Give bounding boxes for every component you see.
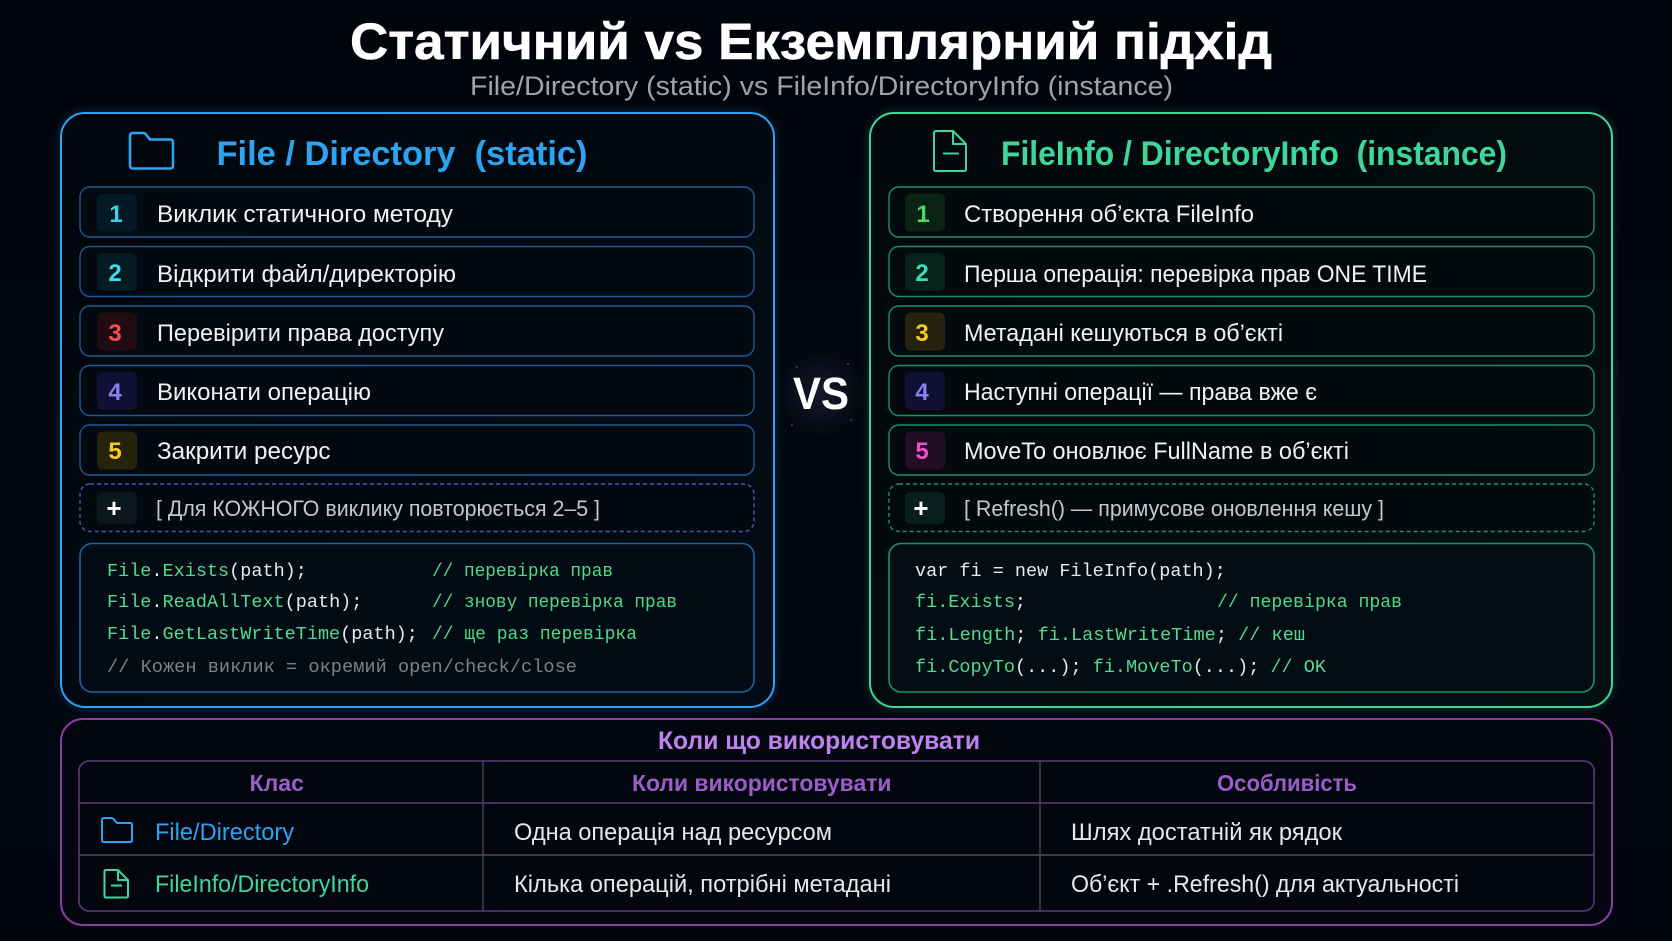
- code block: // перевірка прав: [1217, 592, 1402, 613]
- step 5: 5: [915, 438, 929, 465]
- row: FileInfo/DirectoryInfo: [104, 870, 1459, 898]
- table header: [250, 770, 1357, 796]
- code block: [889, 544, 1594, 692]
- step 1: [889, 187, 1594, 237]
- row: FileInfo/DirectoryInfo: Кілька операцій, потрібні метадані: [514, 871, 891, 898]
- step 3: 3: [915, 320, 929, 347]
- row: File/Directory: File/Directory: [155, 819, 294, 846]
- step 2: Перша операція: перевірка прав ONE TIME: [964, 261, 1427, 288]
- code block: // знову перевірка прав: [432, 592, 677, 613]
- step 3: Метадані кешуються в об’єкті: [964, 320, 1283, 347]
- step 5: [889, 425, 1594, 475]
- step 5: 5: [108, 438, 122, 465]
- step 5: Закрити ресурс: [157, 438, 330, 465]
- step 2: 2: [915, 260, 929, 287]
- repeat note: [80, 484, 754, 532]
- panel: File / Directory (static): [61, 113, 774, 707]
- row: FileInfo/DirectoryInfo: Об’єкт + .Refresh() для актуальності: [1071, 871, 1459, 898]
- VS badge: [775, 347, 867, 439]
- step 2: [889, 246, 1594, 296]
- title: Статичний vs Екземплярний підхід: [350, 13, 1272, 70]
- refresh note: [889, 484, 1594, 532]
- repeat note: [ Для КОЖНОГО виклику повторюється 2–5 ]: [156, 496, 600, 521]
- step 3: Перевірити права доступу: [157, 320, 444, 347]
- refresh note: [ Refresh() — примусове оновлення кешу ]: [964, 496, 1384, 521]
- step 4: [80, 366, 754, 416]
- panel: when to use: [61, 719, 1612, 925]
- step 1: Створення об’єкта FileInfo: [964, 201, 1254, 228]
- section heading: Коли що використовувати: [658, 727, 980, 755]
- row: FileInfo/DirectoryInfo: FileInfo/DirectoryInfo: [155, 871, 369, 898]
- code block: [80, 544, 754, 692]
- code block: // Кожен виклик = окремий open/check/close: [107, 657, 577, 678]
- code block: File.GetLastWriteTime(path);: [107, 624, 418, 645]
- step 4: 4: [108, 379, 122, 406]
- code block: File.ReadAllText(path);: [107, 592, 362, 613]
- step 1: Виклик статичного методу: [157, 201, 453, 228]
- step 4: 4: [915, 379, 929, 406]
- code block: // перевірка прав: [432, 561, 613, 582]
- panel heading: File / Directory (static): [216, 135, 588, 173]
- repeat note: +: [106, 493, 122, 523]
- step 1: 1: [916, 201, 930, 228]
- step 3: [889, 306, 1594, 356]
- step 4: Виконати операцію: [157, 379, 371, 406]
- refresh note: +: [913, 493, 929, 523]
- table header: Клас: [250, 770, 304, 796]
- code block: var fi = new FileInfo(path);: [915, 561, 1226, 582]
- panel heading: FileInfo / DirectoryInfo (instance): [1001, 135, 1507, 173]
- step 1: [80, 187, 754, 237]
- VS badge: VS: [793, 368, 849, 419]
- code block: // ще раз перевірка: [432, 624, 637, 645]
- code block: fi.Length; fi.LastWriteTime; // кеш: [915, 625, 1305, 646]
- step 3: [80, 306, 754, 356]
- subtitle: File/Directory (static) vs FileInfo/DirectoryInfo (instance): [470, 71, 1173, 101]
- code block: fi.CopyTo(...); fi.MoveTo(...); // OK: [915, 657, 1327, 678]
- step 2: 2: [108, 260, 122, 287]
- row: File/Directory: [102, 818, 1342, 846]
- icon: folder: [130, 133, 173, 168]
- table header: Коли використовувати: [632, 770, 892, 796]
- code block: fi.Exists;: [915, 592, 1026, 613]
- row: File/Directory: Шлях достатній як рядок: [1071, 819, 1342, 846]
- step 5: MoveTo оновлює FullName в об’єкті: [964, 438, 1349, 465]
- table header: Особливість: [1217, 770, 1357, 796]
- step 1: 1: [109, 201, 123, 228]
- step 4: Наступні операції — права вже є: [964, 379, 1317, 406]
- step 3: 3: [108, 320, 122, 347]
- panel: FileInfo / DirectoryInfo (instance): [870, 113, 1612, 707]
- step 2: [80, 246, 754, 296]
- row: File/Directory: Одна операція над ресурсом: [514, 819, 832, 846]
- step 2: Відкрити файл/директорію: [157, 261, 456, 288]
- step 4: [889, 366, 1594, 416]
- table: [79, 761, 1594, 911]
- code block: File.Exists(path);: [107, 561, 307, 582]
- icon: file: [934, 131, 966, 171]
- step 5: [80, 425, 754, 475]
